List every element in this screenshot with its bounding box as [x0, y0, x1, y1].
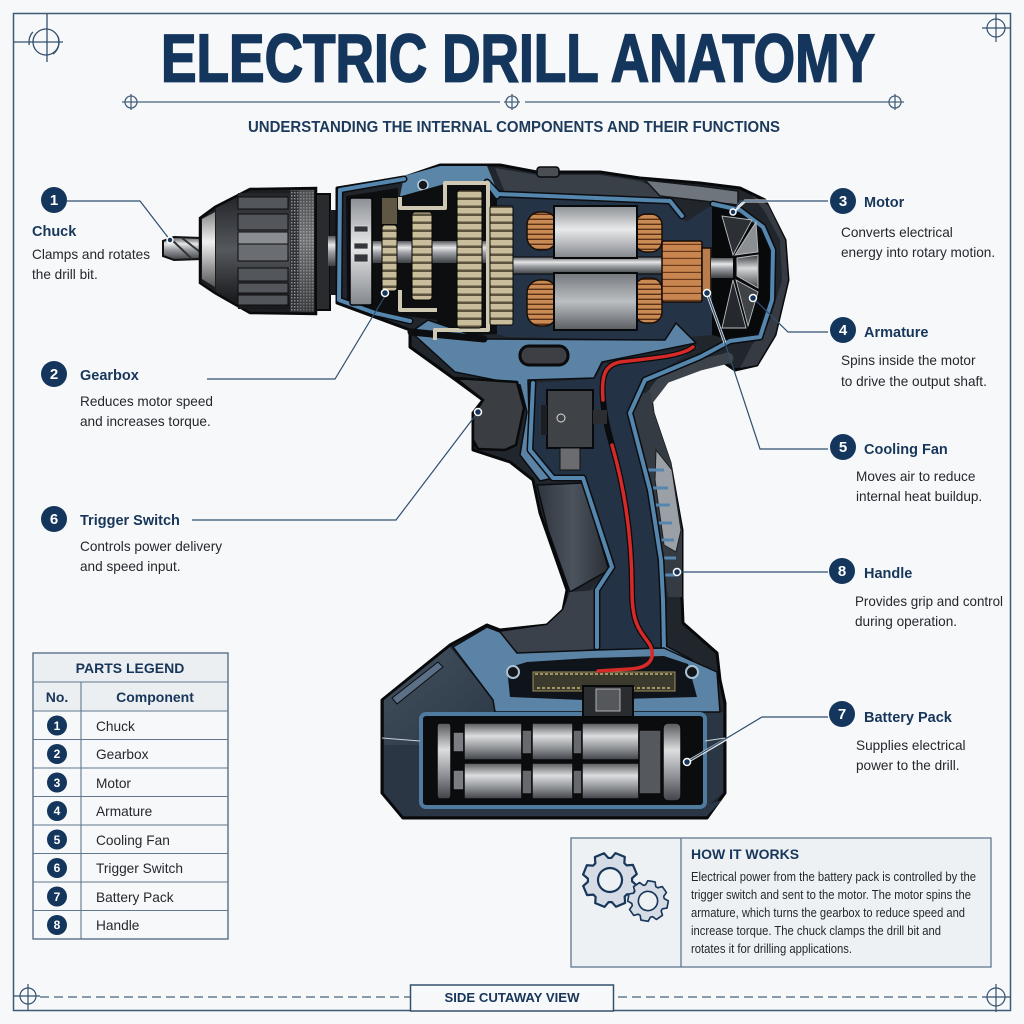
- battery right casing: [705, 712, 723, 808]
- small gear: [412, 212, 432, 300]
- wire to board: [598, 645, 652, 671]
- label 8: handle: 8: [838, 563, 846, 580]
- grip: [537, 483, 609, 592]
- footer dashed rule: [40, 996, 980, 998]
- legend rows: Handle: [96, 918, 139, 933]
- right windings: [635, 214, 662, 323]
- legend rows: 6: [54, 861, 61, 875]
- label 7: battery pack: Battery Pack: [864, 710, 953, 726]
- label 5: cooling fan: Cooling Fan: [864, 442, 948, 458]
- label 4: armature: to drive the output shaft.: [841, 374, 987, 389]
- armature shaft: [513, 257, 713, 274]
- top cover highlight: [495, 168, 670, 200]
- subtitle: UNDERSTANDING THE INTERNAL COMPONENTS AND THEIR FUNCTIONS: [248, 119, 780, 136]
- legend rows: 2: [54, 747, 61, 761]
- how it works body: armature, which turns the gearbox to reduce speed and: [691, 906, 965, 920]
- label 4: armature: [830, 317, 987, 389]
- label 2: gearbox: Reduces motor speed: [80, 394, 213, 409]
- legend column heads: No.: [46, 689, 68, 705]
- legend heading: PARTS LEGEND: [76, 660, 184, 676]
- label 8: handle: Provides grip and control: [855, 594, 1003, 609]
- label 5: cooling fan: 5: [839, 439, 847, 456]
- footer tag: [410, 985, 614, 1011]
- label 2: gearbox: [41, 361, 213, 429]
- fan cavity: [712, 205, 773, 340]
- lower cavity: [507, 656, 697, 700]
- light blue shell top: [400, 166, 498, 196]
- ring gear: [382, 225, 397, 291]
- shell boss: [418, 180, 428, 190]
- label 4: armature: Spins inside the motor: [841, 353, 976, 368]
- legend rows: 1: [54, 719, 61, 733]
- legend rows: 4: [54, 804, 61, 818]
- footer tag: SIDE CUTAWAY VIEW: [444, 990, 580, 1005]
- planetary slots: [354, 226, 368, 262]
- icon: gears: [575, 845, 671, 924]
- rear shell ribs: [647, 470, 678, 575]
- button on top: [537, 167, 559, 177]
- legend rows: 3: [54, 776, 61, 790]
- label 7: battery pack: [829, 701, 966, 773]
- label 1: chuck: Chuck: [32, 224, 77, 240]
- label 8: handle: Handle: [864, 566, 912, 582]
- label 6: trigger switch: [41, 506, 222, 574]
- how it works body: increase torque. The chuck clamps the drill bit and: [691, 924, 941, 938]
- left windings: [527, 212, 557, 326]
- grip texture: [655, 450, 681, 552]
- legend rows: Gearbox: [96, 747, 149, 762]
- gear chamber: [346, 183, 497, 337]
- how it works heading: HOW IT WORKS: [691, 846, 799, 862]
- stator: [554, 206, 637, 330]
- panel: how it works: [571, 838, 991, 967]
- legend rows: Cooling Fan: [96, 833, 170, 848]
- battery lower casing: [384, 745, 722, 816]
- label 1: chuck: 1: [50, 192, 58, 209]
- label 7: battery pack: 7: [838, 706, 846, 723]
- title ornament rule: [122, 94, 904, 110]
- rear fan cap shading: [740, 195, 788, 368]
- blue shell lines: [339, 179, 773, 662]
- ring carrier: [350, 198, 372, 305]
- legend rows: Chuck: [96, 719, 135, 734]
- bearing top: [382, 198, 397, 224]
- label 5: cooling fan: [830, 434, 982, 504]
- housing inner liner: [400, 183, 488, 340]
- rear vents: [645, 180, 738, 205]
- label 2: gearbox: Gearbox: [80, 368, 139, 384]
- switch module: [541, 390, 607, 470]
- label 8: handle: [829, 558, 1003, 629]
- legend rows: Motor: [96, 776, 131, 791]
- grip lower: [500, 590, 597, 653]
- legend rows: 8: [54, 918, 61, 932]
- label 7: battery pack: Supplies electrical: [856, 738, 966, 753]
- legend column heads: Component: [116, 689, 194, 705]
- housing silhouette: [337, 165, 788, 818]
- label 3: motor: Converts electrical: [841, 225, 953, 240]
- rear grip band: [632, 392, 682, 597]
- legend column heads: [46, 689, 194, 705]
- label 6: trigger switch: and speed input.: [80, 559, 181, 574]
- legend rows: 7: [54, 890, 61, 904]
- label 1: chuck: [32, 187, 150, 282]
- label 5: cooling fan: internal heat buildup.: [856, 489, 982, 504]
- how it works body: Electrical power from the battery pack is controlled by the: [691, 870, 976, 884]
- how it works body: trigger switch and sent to the motor. The motor spins the: [691, 888, 971, 902]
- icon: crosshair top left: [14, 14, 63, 62]
- red wire: [598, 347, 693, 671]
- rear handle neck: [648, 358, 728, 400]
- label 6: trigger switch: Controls power delivery: [80, 539, 222, 554]
- icon: crosshair bottom right: [982, 984, 1011, 1012]
- battery side seam: [382, 738, 725, 741]
- label 7: battery pack: power to the drill.: [856, 758, 960, 773]
- label 1: chuck: Clamps and rotates: [32, 247, 150, 262]
- large gear: [457, 190, 482, 328]
- battery shell: [384, 647, 506, 745]
- fan shaft: [711, 258, 733, 278]
- icon: crosshair top right: [982, 14, 1011, 42]
- panel: parts legend: [33, 653, 228, 939]
- handle cavity: [530, 346, 700, 650]
- label 5: cooling fan: Moves air to reduce: [856, 469, 975, 484]
- drill bit: [163, 237, 201, 260]
- legend rows: Battery Pack: [96, 890, 174, 905]
- main shaft: [352, 241, 492, 263]
- forward reverse button: [520, 346, 568, 365]
- battery vent: [392, 662, 443, 704]
- legend rows: [47, 716, 183, 935]
- callout lines: [67, 201, 828, 766]
- how it works body: rotates it for drilling applications.: [691, 942, 852, 956]
- label 6: trigger switch: Trigger Switch: [80, 513, 180, 529]
- motor chamber: [497, 197, 712, 340]
- label 3: motor: energy into rotary motion.: [841, 245, 995, 260]
- commutator: [662, 241, 711, 302]
- mounting bosses: [507, 666, 698, 678]
- blue shell plate above battery: [453, 627, 720, 712]
- battery connector: [583, 686, 633, 717]
- label 4: armature: Armature: [864, 325, 928, 341]
- drill illustration: [163, 165, 788, 818]
- fan: [722, 216, 758, 328]
- label 8: handle: during operation.: [855, 614, 957, 629]
- label 6: trigger switch: 6: [50, 511, 58, 528]
- icon: crosshair bottom left: [14, 984, 40, 1010]
- trigger: [455, 378, 524, 450]
- legend rows: Trigger Switch: [96, 861, 183, 876]
- label 3: motor: 3: [839, 193, 847, 210]
- label 2: gearbox: 2: [50, 366, 58, 383]
- legend rows: 5: [54, 833, 61, 847]
- legend rows: Armature: [96, 804, 152, 819]
- label 1: chuck: the drill bit.: [32, 267, 98, 282]
- chuck: [200, 188, 352, 314]
- battery window: [421, 714, 705, 807]
- light blue lower panel: [411, 320, 696, 481]
- label 3: motor: Motor: [864, 195, 905, 211]
- second gear: [490, 206, 513, 325]
- how it works body: [691, 870, 976, 956]
- label 3: motor: [830, 188, 995, 260]
- label 2: gearbox: and increases torque.: [80, 414, 211, 429]
- label 4: armature: 4: [839, 322, 848, 339]
- battery cells: [437, 723, 681, 801]
- circuit board: [533, 672, 675, 691]
